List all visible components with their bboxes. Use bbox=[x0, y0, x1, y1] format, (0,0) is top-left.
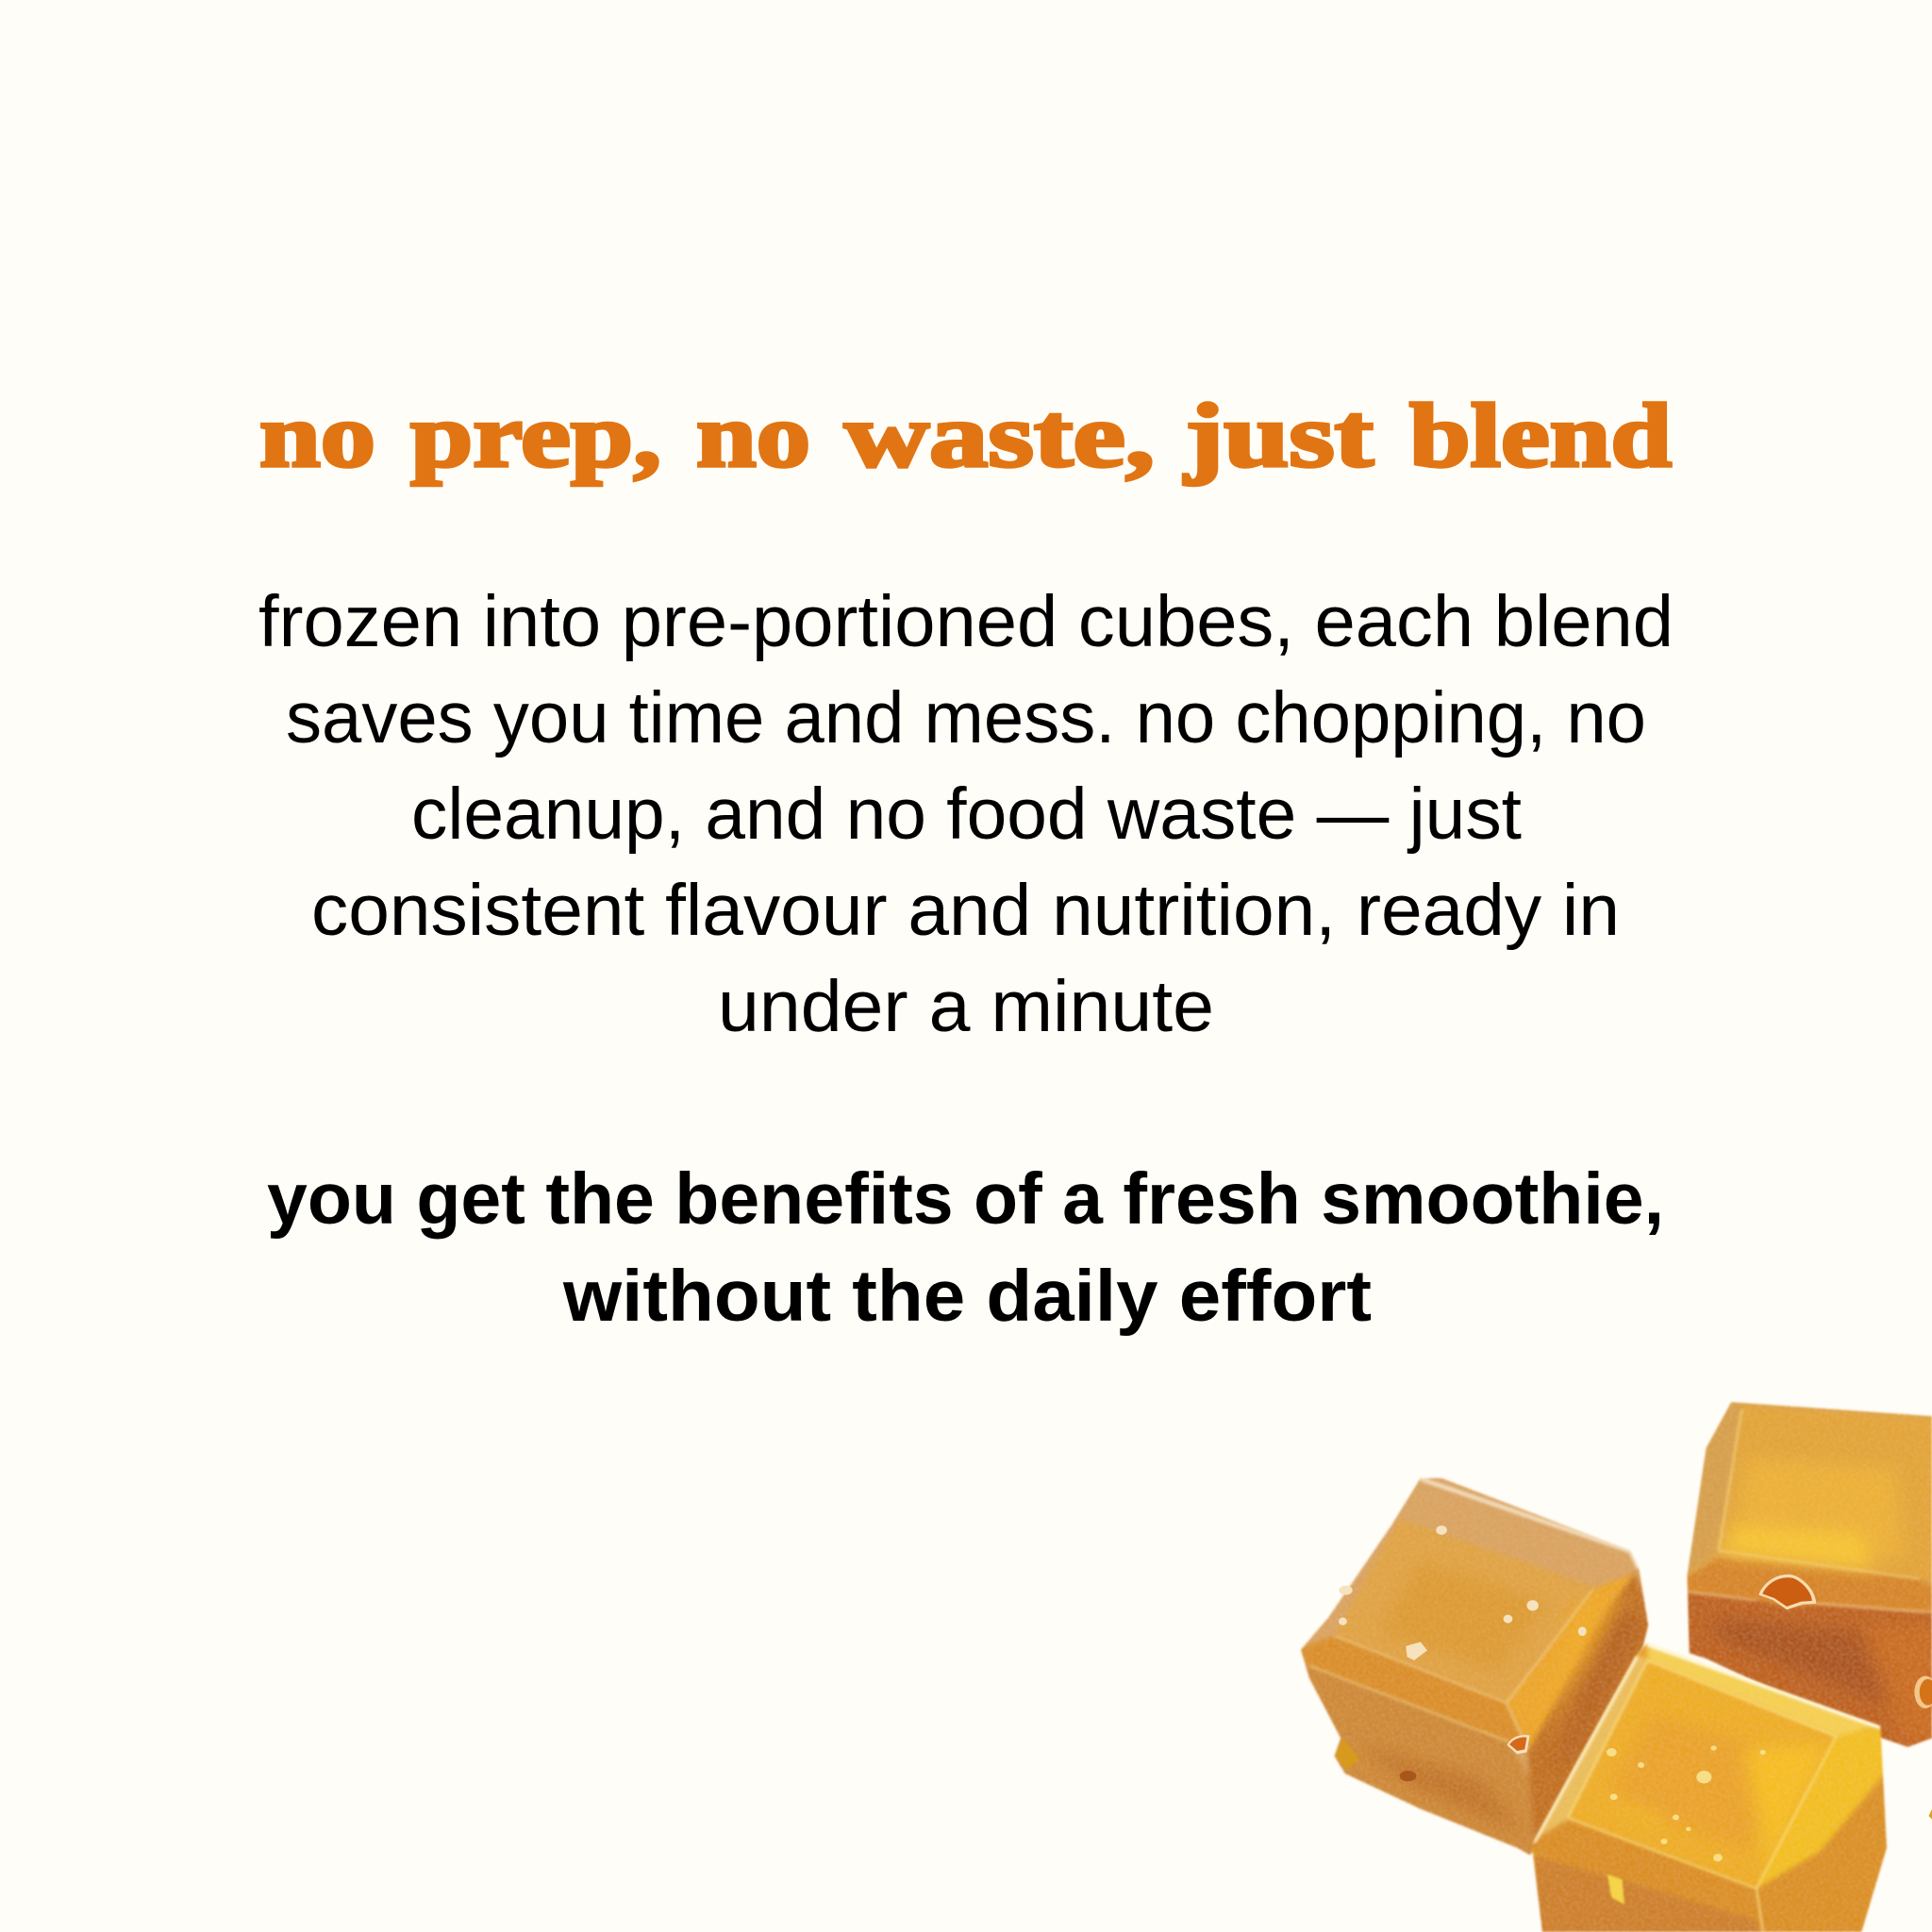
body text block bbox=[258, 581, 1674, 1047]
bold closing statement: without the daily effort bbox=[562, 1256, 1372, 1337]
body text block: saves you time and mess. no chopping, no bbox=[286, 677, 1646, 758]
icon: right cube bbox=[1676, 1395, 1932, 1753]
body text block: under a minute bbox=[718, 966, 1214, 1047]
infographic canvas bbox=[259, 401, 1932, 1932]
heading: no bbox=[259, 385, 375, 486]
bold closing statement bbox=[267, 1158, 1664, 1337]
icon: front cube speckles bbox=[1607, 1745, 1766, 1861]
heading: blend bbox=[1409, 385, 1672, 486]
icon: front cube bbox=[1525, 1636, 1895, 1932]
heading: no bbox=[696, 385, 810, 486]
body text block: cleanup, and no food waste — just bbox=[411, 774, 1522, 855]
heading bbox=[259, 385, 1672, 486]
bold closing statement: you get the benefits of a fresh smoothie, bbox=[267, 1158, 1664, 1240]
icon: left cube bbox=[1291, 1470, 1656, 1862]
heading: just bbox=[1184, 385, 1374, 486]
icon: small fragment bbox=[1929, 1809, 1932, 1820]
icon: right cube hole bbox=[1758, 1574, 1816, 1609]
body text block: frozen into pre-portioned cubes, each blend bbox=[258, 581, 1674, 662]
icon: left cube speckles bbox=[1339, 1525, 1587, 1781]
heading: prep, bbox=[410, 385, 661, 486]
heading: waste, bbox=[844, 385, 1155, 486]
illustration: frozen smoothie cubes bbox=[1291, 1395, 1932, 1932]
body text block: consistent flavour and nutrition, ready in bbox=[311, 870, 1620, 951]
